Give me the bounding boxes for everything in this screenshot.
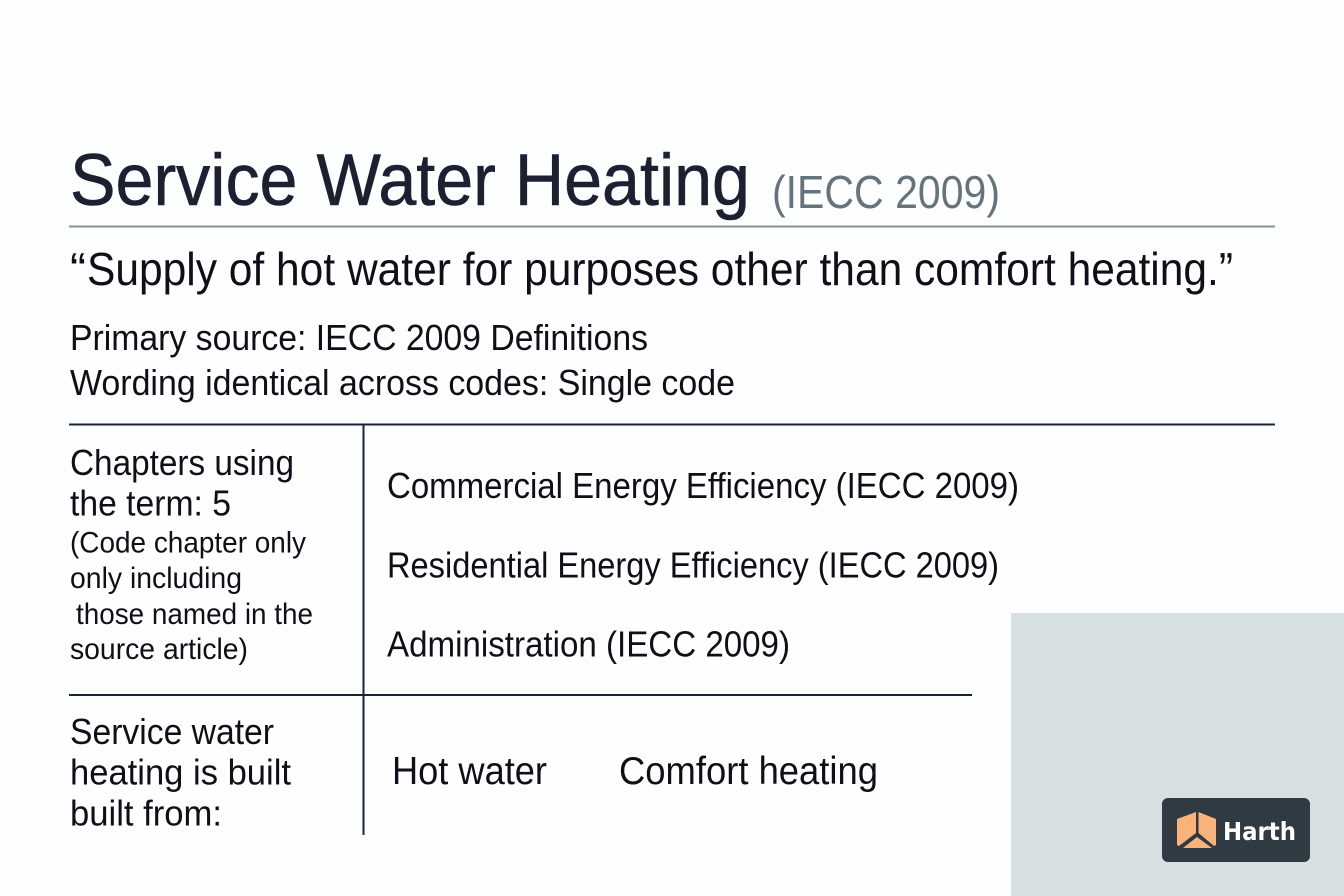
- subtitle: code edition: (IECC 2009): [772, 166, 1000, 218]
- component: hot water: Hot water: [392, 750, 547, 793]
- row label: built from: built from:: [70, 792, 222, 834]
- logo wordmark: Harth: [1223, 817, 1296, 846]
- row label: chapters using the term: only including: [70, 562, 242, 595]
- row label: chapters using the term: the term: 5: [70, 482, 231, 524]
- row label: built from: heating is built: [70, 752, 291, 792]
- row label: chapters using the term: (Code chapter only: [70, 526, 306, 560]
- component: comfort heating: Comfort heating: [619, 750, 878, 793]
- chapter list: Residential Energy Efficiency (IECC 2009): [387, 544, 999, 586]
- row label: chapters using the term: Chapters using: [70, 442, 294, 483]
- chapter list: Administration (IECC 2009): [387, 624, 790, 664]
- title: Service Water Heating: [70, 140, 750, 221]
- chapter list: [387, 465, 1019, 664]
- chapter list: Commercial Energy Efficiency (IECC 2009): [387, 465, 1019, 506]
- panel: decorative corner block: [1011, 613, 1344, 896]
- definition quote: Supply of hot water for purposes other than comfort heating.”: [87, 243, 1233, 295]
- source information: [70, 317, 735, 403]
- logo: Harth badge: [1162, 798, 1310, 862]
- row label: chapters using the term: those named in the: [76, 598, 313, 631]
- definition quote: “: [70, 243, 86, 295]
- icon: orange open box: [1177, 812, 1216, 848]
- row label: chapters using the term: [70, 442, 313, 666]
- source information: Wording identical across codes: Single code: [70, 362, 735, 403]
- row label: built from: [70, 711, 291, 834]
- row label: chapters using the term: source article): [70, 633, 248, 666]
- row label: built from: Service water: [70, 711, 274, 752]
- source information: Primary source: IECC 2009 Definitions: [70, 317, 648, 358]
